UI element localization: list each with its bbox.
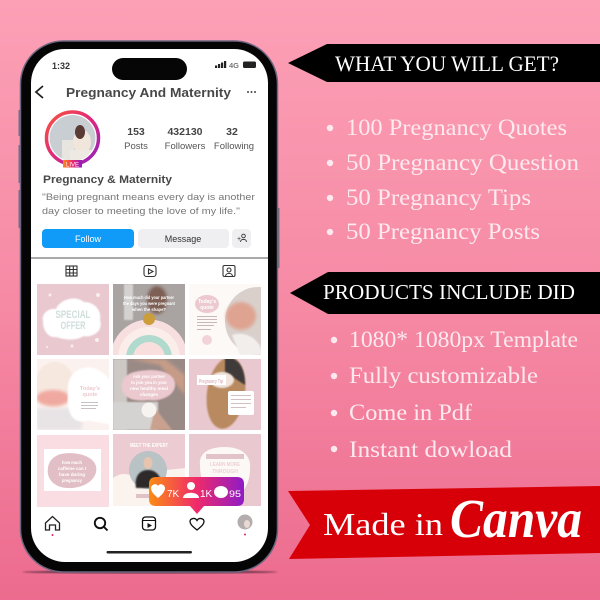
profile bio: "Being pregnant means every day is another [42, 192, 255, 203]
action buttons: Message [165, 234, 201, 244]
post: meet the expert [113, 434, 185, 506]
status bar [52, 58, 256, 80]
post grid [37, 284, 261, 507]
profile header: Pregnancy And Maternity [66, 85, 232, 100]
banner: made in canva [288, 486, 600, 559]
notification bubble: 1K [200, 489, 213, 500]
profile stats: 32 [226, 126, 238, 138]
action buttons: Follow [75, 234, 101, 244]
banner: made in canva: Made in [323, 506, 443, 542]
post: learn more [189, 434, 261, 506]
profile picture [46, 112, 98, 168]
post: how much caffeine: how much [62, 460, 82, 466]
post: today's quote with photo [189, 284, 261, 355]
post: special offer: SPECIAL [56, 309, 91, 321]
profile bio: day closer to meeting the love of my life." [42, 206, 240, 217]
banner: made in canva: Canva [450, 488, 582, 549]
post: rainbow question: the days you were pregnant [123, 301, 175, 307]
profile tabs [31, 258, 268, 276]
home indicator [106, 551, 192, 554]
list: what you will get: 50 Pregnancy Tips [346, 185, 531, 210]
list: products include: 1080* 1080px Template [349, 327, 578, 352]
post: special offer: OFFER [60, 320, 86, 332]
post: baby photo: quote [83, 392, 97, 398]
post: rainbow question [113, 284, 185, 355]
profile bio: Pregnancy & Maternity [43, 174, 173, 186]
bottom navigation [46, 514, 252, 536]
post: rainbow question: when the shape? [131, 307, 166, 313]
banner: products include [290, 272, 600, 314]
profile bio [42, 174, 255, 217]
banner: what you will get: WHAT YOU WILL GET? [335, 51, 559, 76]
profile stats: Followers [165, 141, 206, 152]
action buttons: + [237, 236, 241, 243]
list: what you will get: 50 Pregnancy Question [346, 150, 580, 175]
banner: products include: PRODUCTS INCLUDE DID [323, 280, 575, 304]
post: belly photo [113, 359, 185, 430]
phone mockup [18, 41, 291, 574]
profile stats: Posts [124, 141, 148, 152]
post: how much caffeine: caffeine can I [58, 466, 87, 472]
post: how much caffeine: have during [59, 472, 85, 478]
list: products include: Instant dowload [349, 437, 513, 462]
post: belly photo: to join you in your [131, 380, 167, 386]
post: learn more: THROUGH [212, 469, 238, 475]
post: belly photo: new healthy meal [130, 386, 168, 392]
post: baby photo: Today's [80, 386, 100, 392]
banner: what you will get [288, 44, 600, 82]
post: special offer [37, 284, 109, 355]
profile stats [124, 126, 254, 152]
post: how much caffeine: pregnancy [62, 478, 82, 484]
post: how much caffeine [37, 435, 109, 507]
post: today's quote with photo: Today's [198, 299, 216, 305]
post: today's quote with photo: quote [200, 305, 214, 311]
action buttons [42, 229, 251, 248]
list: products include [331, 327, 578, 462]
list: products include: Come in Pdf [349, 400, 472, 425]
profile stats: 153 [127, 126, 145, 138]
post: pregnancy tip: Pregnancy Tip [199, 379, 223, 385]
notification bubble: 95 [229, 489, 241, 500]
list: what you will get: 50 Pregnancy Posts [346, 219, 540, 244]
profile picture: LIVE [66, 162, 79, 168]
profile stats: 432130 [167, 126, 203, 138]
post: meet the expert: MEET THE EXPERT [130, 443, 168, 449]
status bar: 1:32 [52, 61, 70, 72]
post: belly photo: Ask your partner [133, 374, 165, 380]
post: pregnancy tip [189, 355, 261, 431]
post: rainbow question: How much did your partner [124, 295, 174, 301]
list: what you will get [327, 115, 580, 244]
list: what you will get: 100 Pregnancy Quotes [346, 115, 567, 140]
notification bubble [149, 477, 244, 514]
post: learn more: LEARN MORE [210, 462, 240, 468]
status bar: 4G [229, 61, 239, 70]
notification bubble: 7K [167, 489, 180, 500]
list: products include: Fully customizable [349, 363, 538, 388]
post: belly photo: changes [140, 392, 158, 398]
profile stats: Following [214, 141, 254, 152]
post: baby photo [35, 359, 110, 430]
